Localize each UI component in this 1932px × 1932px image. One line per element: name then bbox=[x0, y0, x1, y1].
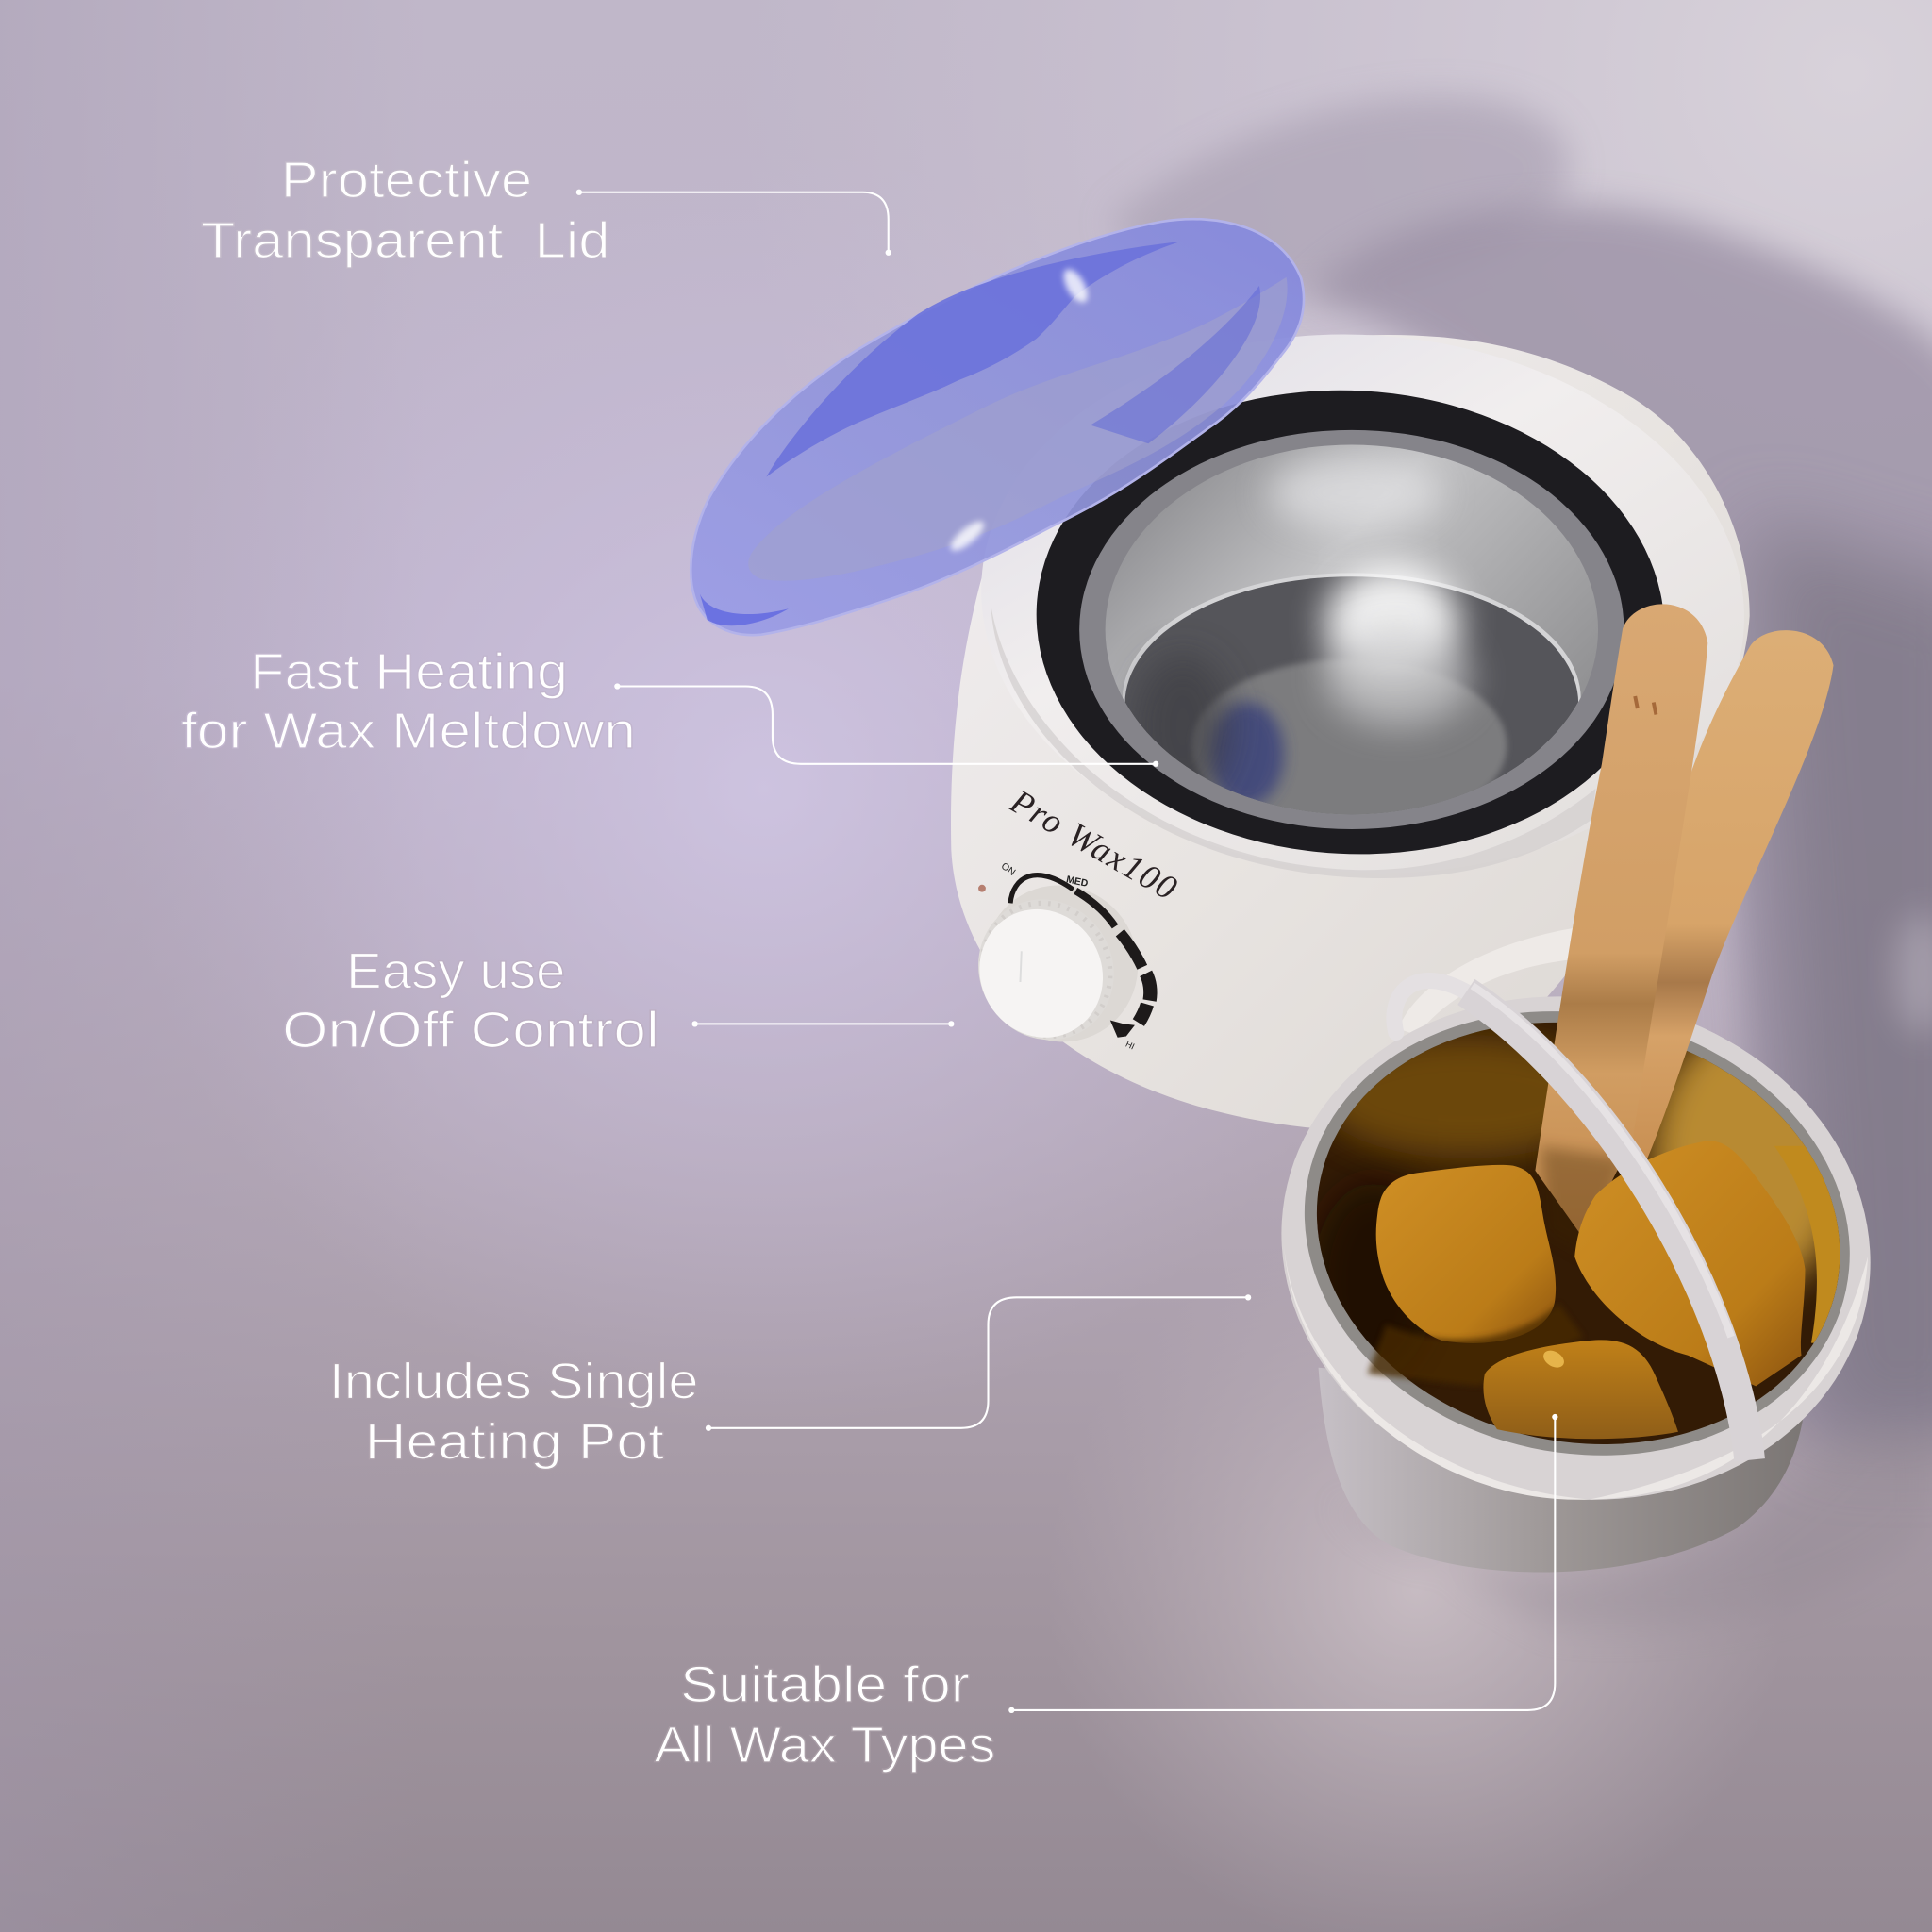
dial labels: ON bbox=[999, 861, 1017, 878]
spatula back bbox=[1626, 630, 1834, 1164]
metal pot rim bbox=[1079, 430, 1624, 829]
callout: protective transparent lid bbox=[201, 153, 891, 269]
callout: fast heating bbox=[181, 644, 1158, 767]
brand and dial: MED bbox=[1065, 874, 1090, 890]
wax cube left bbox=[1376, 1165, 1556, 1343]
metal pot interior bbox=[1123, 456, 1581, 832]
indicator light bbox=[978, 885, 986, 892]
brand name: Pro Wax100 bbox=[1004, 781, 1184, 908]
wooden spatulas bbox=[1535, 604, 1834, 1257]
silver pot base bbox=[1319, 1368, 1805, 1572]
cast shadows bbox=[1109, 97, 1932, 1629]
wax warmer body bbox=[951, 309, 1762, 1128]
callout: on/off control: On/Off Control bbox=[282, 1003, 659, 1058]
warmer handle lug bbox=[1398, 926, 1583, 1035]
lid handle recess bbox=[766, 242, 1180, 476]
heating pot bbox=[1281, 604, 1871, 1572]
brand and dial: HI bbox=[1124, 1040, 1136, 1052]
brand and dial bbox=[953, 781, 1184, 1070]
callout: fast heating: Fast Heating bbox=[250, 644, 568, 700]
callout: on/off control bbox=[282, 944, 954, 1058]
callout: single heating pot bbox=[329, 1294, 1251, 1470]
black gasket bbox=[1024, 375, 1676, 870]
callout: all wax types: Suitable for bbox=[680, 1657, 970, 1713]
callout: single heating pot: Heating Pot bbox=[365, 1414, 664, 1470]
callout: protective transparent lid: Protective bbox=[281, 153, 532, 208]
spatula front bbox=[1535, 604, 1707, 1239]
callout: protective transparent lid: Transparent Lid bbox=[201, 213, 610, 269]
dial scale bbox=[1010, 875, 1150, 1038]
warmer rim bbox=[963, 309, 1762, 898]
protective lid bbox=[691, 219, 1304, 635]
pot interior bbox=[1317, 1023, 1840, 1444]
callout: on/off control: Easy use bbox=[346, 944, 566, 1000]
callout: all wax types bbox=[655, 1414, 1557, 1774]
knob housing bbox=[956, 858, 1166, 1070]
callout: all wax types: All Wax Types bbox=[655, 1718, 995, 1774]
wax cube right bbox=[1574, 1141, 1805, 1386]
pot handle bbox=[1394, 981, 1473, 1033]
pot metal ring bbox=[1263, 961, 1891, 1505]
lid flat panel bbox=[748, 277, 1288, 581]
pot plastic rim bbox=[1241, 951, 1910, 1546]
control knob bbox=[953, 874, 1140, 1065]
wax cube front bbox=[1483, 1340, 1678, 1439]
callout: fast heating: for Wax Meltdown bbox=[181, 704, 636, 759]
callout: single heating pot: Includes Single bbox=[329, 1354, 699, 1409]
